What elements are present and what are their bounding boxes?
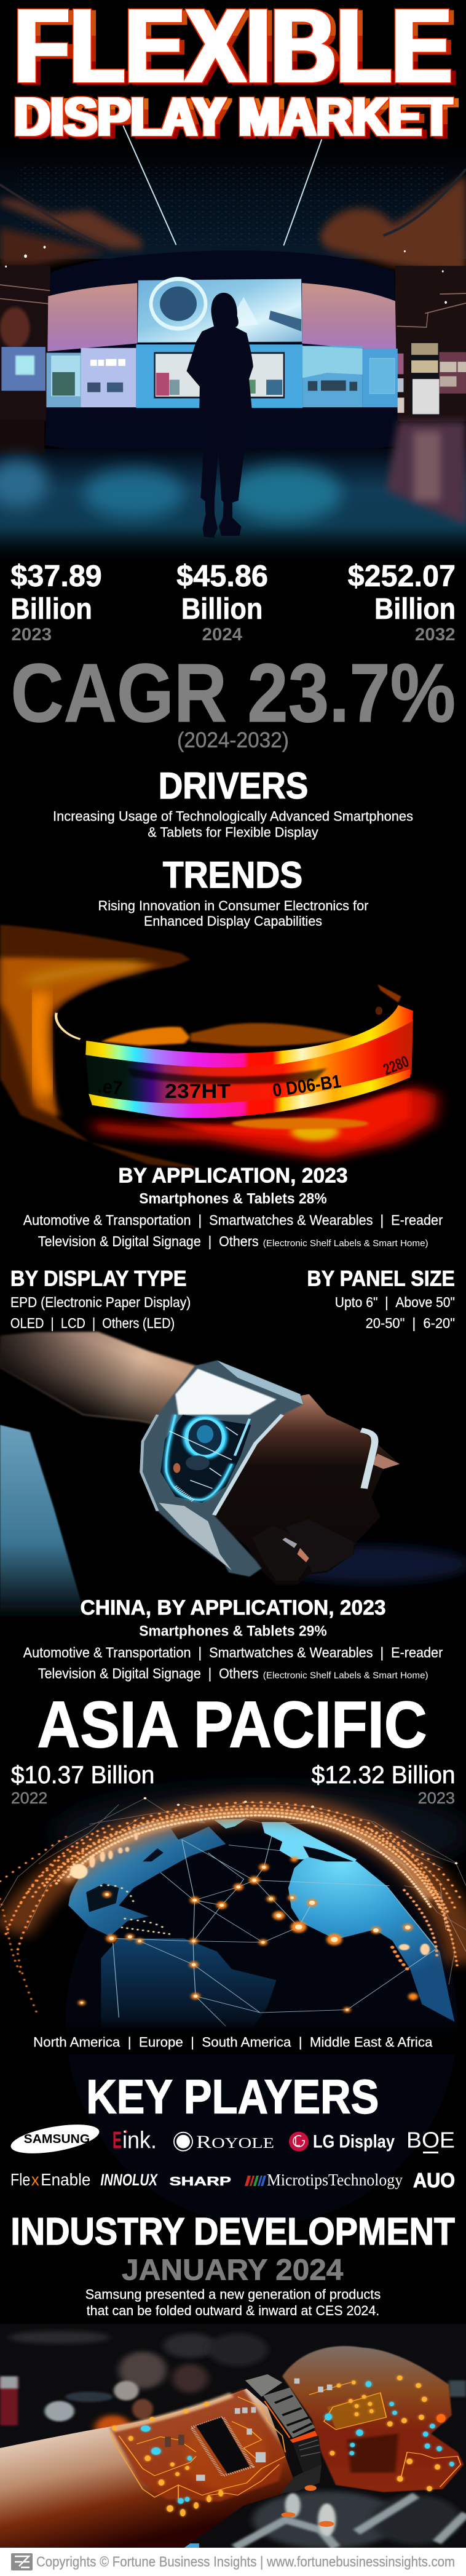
stat: 2023 market size — [10, 560, 102, 645]
South America landmass — [101, 1938, 277, 2029]
logo: Sharp: SHARP — [170, 2175, 231, 2188]
skin-mounted components — [165, 2379, 332, 2481]
stat: Asia Pacific 2023: $12.32 Billion — [312, 1762, 456, 1789]
section: by application 2023: Television & Digital Signage | Others — [38, 1233, 259, 1249]
forearm — [0, 2388, 297, 2548]
logo: AUO: AUO — [413, 2169, 455, 2192]
logo: BOE: BOE — [406, 2128, 455, 2153]
logo: FlexEnable — [10, 2170, 90, 2189]
section: by panel size: BY PANEL SIZE — [307, 1267, 455, 1291]
band middle face — [85, 1019, 413, 1108]
rim city dots — [0, 1802, 460, 2017]
date: January 2024: JANUARY 2024 — [122, 2254, 344, 2287]
wristband — [245, 2374, 322, 2493]
microchip — [192, 2417, 253, 2476]
rim network threads — [0, 1799, 466, 1984]
upper left pink screen — [47, 283, 137, 351]
heading: drivers: DRIVERS — [159, 765, 308, 806]
heading: Asia Pacific: ASIA PACIFIC — [37, 1688, 427, 1762]
hand — [282, 2346, 464, 2492]
woman silhouette — [187, 293, 253, 538]
stat: Asia Pacific 2022: $10.37 Billion — [11, 1762, 154, 1789]
logo: E Ink: ink. — [122, 2128, 157, 2154]
footer bar — [0, 2548, 466, 2576]
stat: Asia Pacific 2023: 2023 — [418, 1789, 455, 1807]
lower screens row — [46, 344, 398, 408]
right kiosk screens — [397, 342, 466, 416]
stat: 2032 market size: 2032 — [415, 625, 456, 645]
glowing network nodes — [78, 1797, 457, 2013]
stat: 2024 market size — [176, 560, 268, 645]
orange atmosphere glow — [12, 1809, 466, 1963]
heading: key players: KEY PLAYERS — [86, 2070, 379, 2124]
band bottom lit strip — [89, 1069, 410, 1118]
stat: Asia Pacific 2023 — [312, 1762, 456, 1807]
other regions list: North America | Europe | South America | Middle East & Africa — [33, 2035, 433, 2049]
section: china by application 2023: Smartphones & Tablets 29% — [139, 1623, 327, 1639]
stat: 2032 market size — [348, 560, 456, 645]
reflective floor — [0, 419, 466, 566]
Europe landmass — [261, 1822, 357, 1864]
stat: 2024 market size: $45.86 — [176, 560, 268, 593]
logo: Royole — [174, 2132, 274, 2152]
orange glow behind band — [0, 924, 202, 1169]
circuit traces — [110, 2382, 460, 2499]
ceiling light lines — [124, 126, 322, 245]
image: glowing flexible band: 2280 — [381, 1052, 411, 1079]
left side screen — [1, 347, 45, 391]
stat: 2024 market size: 2024 — [202, 625, 242, 645]
stat: 2023 market size: $37.89 — [10, 560, 102, 593]
stat: 2032 market size: Billion — [374, 593, 456, 626]
development text: that can be folded outward & inward at CES 2024. — [87, 2303, 379, 2318]
LED dots — [112, 2375, 454, 2516]
stat: 2032 market size: $252.07 — [348, 560, 456, 593]
image: glowing flexible band: .e7 — [97, 1075, 124, 1099]
image: glowing network globe — [0, 1784, 466, 2225]
hero image: curved display wall with silhouette — [0, 126, 466, 566]
image: hand with flexible wrist display — [0, 1332, 466, 1620]
trends text — [98, 898, 368, 929]
drivers text: Increasing Usage of Technologically Advanced Smartphones — [53, 808, 413, 824]
section: by application 2023 — [23, 1164, 443, 1249]
section: china by application 2023: Automotive & Transportation | Smartwatches & Wearables | E-reader — [23, 1644, 443, 1660]
navy background glow — [274, 1546, 466, 1583]
drivers text: & Tablets for Flexible Display — [148, 824, 318, 840]
stat: 2023 market size: Billion — [10, 593, 92, 626]
hand and fingers — [208, 1394, 400, 1585]
stat: 2024 market size: Billion — [181, 593, 263, 626]
CAGR period: (2024-2032) — [177, 728, 289, 752]
section: by application 2023: (Electronic Shelf Labels & Smart Home) — [263, 1238, 428, 1249]
logo: Samsung — [9, 2119, 101, 2159]
logo: Samsung: SAMSUNG — [24, 2133, 90, 2146]
image: arm with circuit board skin — [0, 2324, 466, 2548]
rim city dots glow — [0, 1802, 460, 2017]
Greenland / Iceland — [214, 1819, 247, 1829]
drivers text — [53, 808, 413, 840]
section: china by application 2023: (Electronic Shelf Labels & Smart Home) — [263, 1670, 428, 1680]
Africa landmass — [288, 1856, 455, 2022]
section: by display type: BY DISPLAY TYPE — [10, 1267, 187, 1291]
logo: LG Display: LG Display — [313, 2132, 395, 2152]
section: by application 2023: BY APPLICATION, 2023 — [118, 1164, 348, 1188]
stat: Asia Pacific 2022: 2022 — [11, 1789, 47, 1807]
footer logo — [11, 2553, 33, 2570]
band reflection glow — [92, 1087, 437, 1158]
blurred background bokeh — [0, 2331, 466, 2548]
logo: Innolux: INNOLUX — [100, 2171, 159, 2189]
section: by panel size — [307, 1267, 455, 1331]
curved wall drum — [45, 250, 398, 456]
trends text: Rising Innovation in Consumer Electronics for — [98, 898, 368, 913]
logo: FlexEnable: Fle — [10, 2170, 30, 2189]
band top lit strip — [85, 1005, 413, 1067]
stat: Asia Pacific 2022 — [11, 1762, 154, 1807]
heading: trends: TRENDS — [163, 854, 302, 896]
section: by application 2023: Smartphones & Tablets 28% — [139, 1191, 327, 1207]
section: china by application 2023: Television & Digital Signage | Others — [38, 1665, 259, 1681]
section: by panel size: 20-50" | 6-20" — [366, 1315, 455, 1331]
section: by display type — [10, 1267, 191, 1331]
section: by display type: OLED | LCD | Others (LED) — [10, 1315, 175, 1331]
network lines — [111, 1835, 437, 2026]
section: by display type: EPD (Electronic Paper Display) — [10, 1294, 191, 1310]
trends text: Enhanced Display Capabilities — [144, 913, 322, 929]
section: by application 2023: Automotive & Transportation | Smartwatches & Wearables | E-reader — [23, 1212, 443, 1228]
image: glowing flexible band: 237HT — [165, 1080, 231, 1102]
logo: Royole: ROYOLE — [196, 2132, 274, 2152]
sleeve — [0, 1425, 82, 1620]
development text — [85, 2286, 381, 2318]
image: glowing flexible band — [0, 924, 437, 1169]
North America landmass — [68, 1820, 226, 1936]
logo: E Ink: E — [113, 2128, 122, 2154]
image: glowing flexible band: 0 D06-B1 — [271, 1071, 342, 1101]
logo: LG Display — [289, 2132, 395, 2152]
upper right pink screen — [302, 283, 396, 351]
upper center bright screen — [138, 279, 302, 343]
bright coastal glow streaks — [70, 1832, 430, 1955]
stat: 2023 market size: 2023 — [11, 625, 52, 645]
wrist display body — [141, 1361, 303, 1576]
logo: FlexEnable: Enable — [41, 2170, 90, 2189]
finger ring — [361, 1430, 375, 1489]
section: china by application 2023: CHINA, BY APPLICATION, 2023 — [80, 1596, 386, 1620]
section: china by application 2023 — [23, 1596, 443, 1681]
section: by panel size: Upto 6" | Above 50" — [335, 1294, 455, 1310]
development text: Samsung presented a new generation of products — [85, 2286, 381, 2302]
logo: Microtips Technology: MicrotipsTechnology — [267, 2171, 403, 2189]
logo: FlexEnable: x — [31, 2170, 39, 2189]
LED glow — [112, 2375, 454, 2516]
forearm — [0, 1332, 226, 1427]
